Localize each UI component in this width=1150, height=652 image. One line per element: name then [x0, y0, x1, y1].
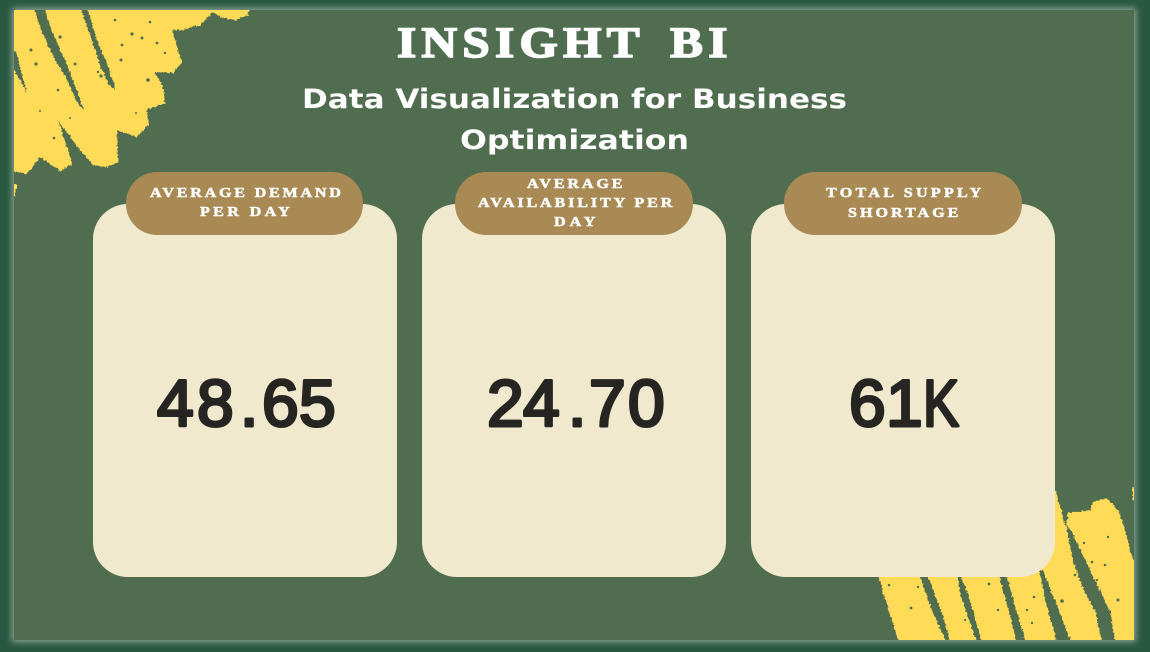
label pill: [784, 172, 1022, 235]
panel: average availability per day: [422, 172, 726, 577]
card background: [93, 204, 397, 577]
panel: average demand per day: [93, 172, 397, 577]
label pill: DAY: [554, 215, 596, 230]
value: 24.70: [487, 366, 665, 440]
label pill: SHORTAGE: [848, 206, 958, 221]
value: 61: [849, 366, 923, 440]
label pill: AVERAGE DEMAND: [150, 186, 341, 201]
subtitle: Optimization: [460, 125, 689, 156]
label pill: AVAILABILITY PER: [478, 196, 674, 211]
label pill: [126, 172, 363, 235]
decoration: yellow scribble bottom right: [878, 485, 1142, 646]
value: [849, 366, 959, 440]
subtitle: [302, 84, 847, 156]
label pill: PER DAY: [200, 205, 290, 220]
card background: [422, 204, 726, 577]
subtitle: Data Visualization for Business: [302, 84, 847, 115]
title: INSIGHT: [397, 20, 640, 67]
value: K: [923, 366, 959, 440]
decoration: yellow scribble top left: [8, 4, 250, 196]
panel: total supply shortage: [751, 172, 1055, 577]
value: 48.65: [157, 366, 336, 440]
label pill: [455, 172, 693, 235]
label pill: AVERAGE: [527, 177, 622, 192]
card background: [751, 204, 1055, 577]
label pill: TOTAL SUPPLY: [826, 186, 981, 201]
title: BI: [670, 20, 728, 67]
